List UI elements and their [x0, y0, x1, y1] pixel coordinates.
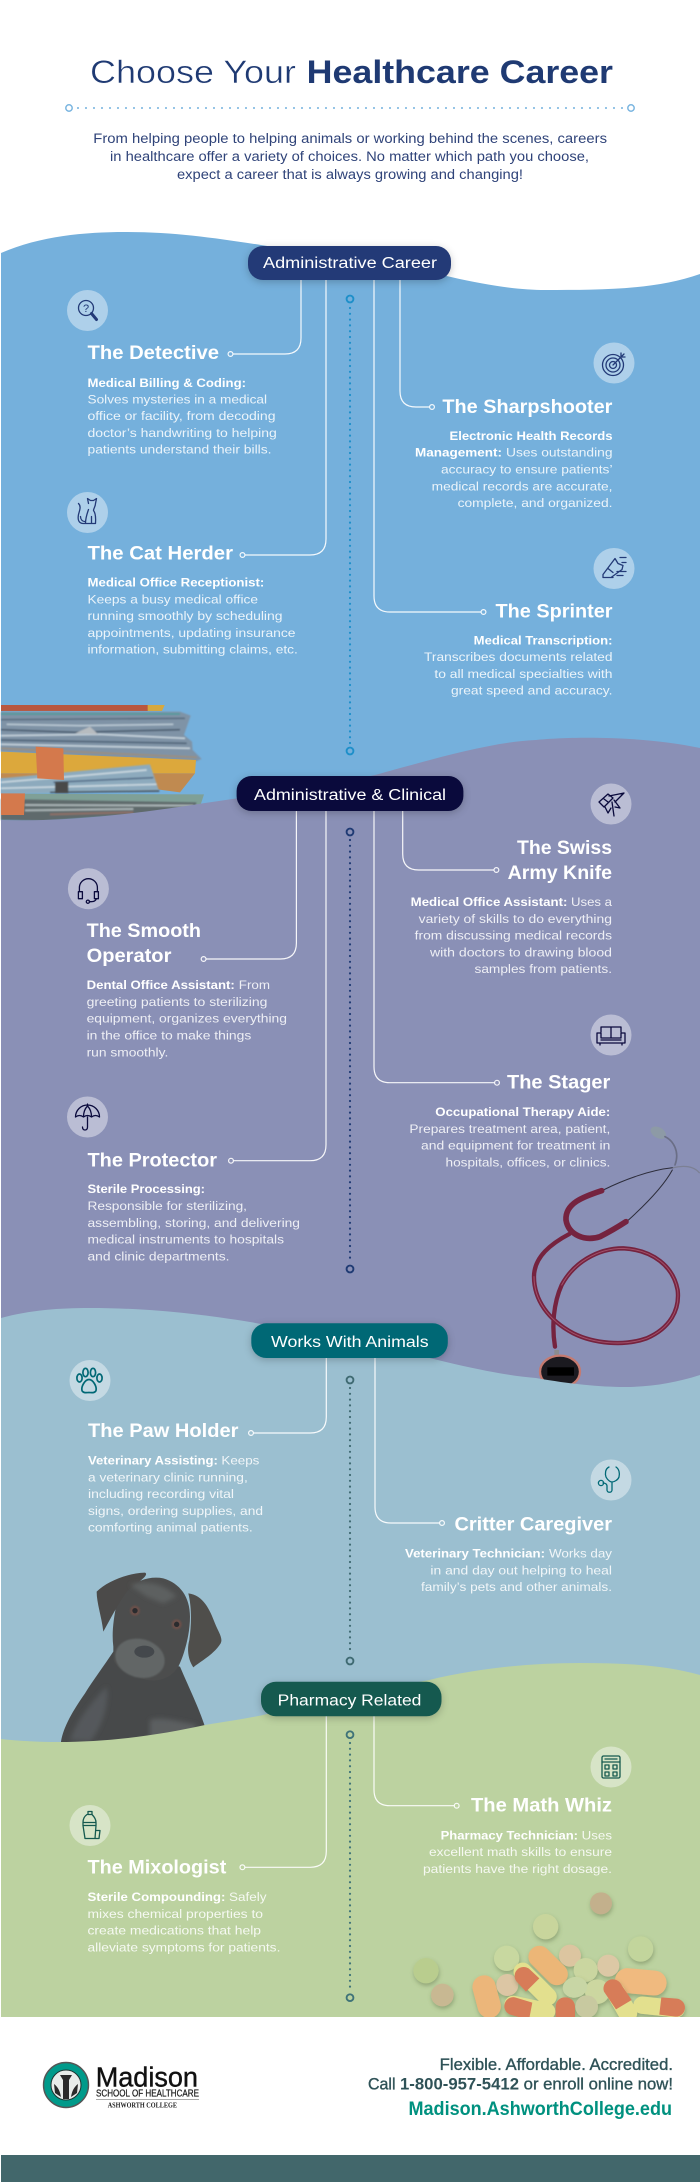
title: Healthcare Career [307, 54, 613, 90]
career: the smooth operator: equipment, organizes everything [87, 1012, 287, 1026]
icon: swiss army knife [590, 784, 632, 824]
photo: pills [413, 1892, 686, 2027]
career: the sprinter: The Sprinter [496, 601, 613, 623]
intro text: From helping people to helping animals or working behind the scenes, careers [93, 131, 607, 146]
footer call to action: 1-800-957-5412 [400, 2076, 519, 2094]
icon: cocktail shaker [70, 1805, 110, 1846]
career: the math whiz: Pharmacy Technician: [441, 1828, 578, 1842]
connectors [240, 1716, 459, 1870]
career: the sprinter: Transcribes documents related [424, 650, 612, 664]
career: the smooth operator: run smoothly. [87, 1046, 168, 1060]
section: works with animals [70, 1323, 632, 1664]
career: the swiss army knife: Army Knife [508, 862, 612, 884]
intro text: in healthcare offer a variety of choices. No matter which path you choose, [110, 149, 589, 164]
logo: madison school of healthcare: ASHWORTH COLLEGE [108, 2100, 177, 2110]
career: the cat herder: Keeps a busy medical office [88, 592, 258, 606]
career: the paw holder: Keeps [221, 1454, 259, 1468]
career: the paw holder: comforting animal patients. [88, 1521, 253, 1535]
photo: puppy [61, 1573, 221, 1750]
footer call to action: Call [368, 2076, 396, 2094]
career: the protector: Sterile Processing: [88, 1182, 205, 1196]
panel background: administrative and clinical [1, 738, 700, 1400]
footer call to action: Flexible. Affordable. Accredited. [440, 2056, 673, 2074]
career: the smooth operator: Operator [87, 945, 172, 967]
career: critter caregiver: Critter Caregiver [454, 1514, 612, 1536]
career: the sharpshooter: medical records are accurate, [432, 479, 612, 493]
career: the swiss army knife: Medical Office Assistant: [411, 895, 567, 909]
logo: madison school of healthcare [44, 2062, 199, 2110]
icon: magnifying glass [67, 290, 108, 331]
career: the cat herder: Medical Office Receptionist: [88, 576, 264, 590]
career: the protector: medical instruments to hospitals [88, 1233, 284, 1247]
section: pharmacy related [70, 1682, 632, 2001]
logo: madison school of healthcare: Madison [96, 2062, 198, 2093]
career: the stager [409, 1072, 611, 1170]
career: the stager: Prepares treatment area, patient, [409, 1122, 610, 1136]
career: the smooth operator: The Smooth [87, 920, 201, 942]
footer bar [1, 2155, 700, 2182]
career: critter caregiver: Works day [549, 1547, 613, 1561]
career: the protector: Responsible for sterilizing, [88, 1199, 247, 1213]
career: the sharpshooter: The Sharpshooter [442, 396, 613, 418]
career: the cat herder: information, submitting claims, etc. [88, 643, 298, 657]
central dotted line [347, 1377, 353, 1664]
career: the protector: assembling, storing, and delivering [88, 1216, 300, 1230]
section: administrative career [67, 246, 634, 754]
pill heading: administrative career: Administrative Career [263, 255, 437, 272]
career: the detective: Medical Billing & Coding: [88, 376, 246, 390]
career: the paw holder [88, 1420, 263, 1535]
career: the paw holder: signs, ordering supplies, and [88, 1504, 263, 1518]
panel background: administrative career [1, 232, 700, 830]
career: critter caregiver: family’s pets and other animals. [421, 1580, 612, 1594]
logo: madison school of healthcare: SCHOOL OF HEALTHCARE [96, 2088, 199, 2100]
title divider [66, 105, 634, 111]
career: the stager: and equipment for treatment in [421, 1139, 610, 1153]
career: the cat herder: appointments, updating insurance [88, 626, 296, 640]
career: the smooth operator: From [239, 978, 270, 992]
logo seal [44, 2062, 88, 2108]
footer call to action [368, 2056, 673, 2120]
icon: magnifying glass: ? [83, 303, 89, 315]
career: the paw holder: The Paw Holder [88, 1420, 239, 1442]
career: the swiss army knife: with doctors to drawing blood [429, 945, 612, 959]
career: the sprinter: Medical Transcription: [474, 633, 612, 647]
career: the sprinter: to all medical specialties with [434, 667, 612, 681]
career: the mixologist: Safely [229, 1890, 268, 1904]
photo: stethoscope [534, 1124, 699, 1388]
pill heading: works with animals [251, 1323, 448, 1358]
career: the detective [88, 342, 277, 456]
career: the cat herder [88, 542, 298, 657]
central dotted line [347, 829, 353, 1272]
career: the swiss army knife: from discussing medical records [415, 929, 612, 943]
icon: umbrella [67, 1096, 108, 1138]
career: the sharpshooter: complete, and organized. [458, 496, 612, 510]
career: the math whiz: The Math Whiz [471, 1795, 612, 1817]
career: the sharpshooter [415, 396, 613, 510]
career: the detective: Solves mysteries in a medical [88, 392, 267, 406]
pill heading: administrative and clinical: Administrative & Clinical [254, 787, 446, 804]
panel background: pharmacy related [1, 1663, 700, 2017]
photo: stack of folders [1, 705, 204, 821]
career: the mixologist [88, 1857, 280, 1954]
section: administrative and clinical [67, 776, 632, 1272]
career: the protector [88, 1150, 300, 1264]
career: the swiss army knife: The Swiss [517, 837, 612, 859]
career: the mixologist: alleviate symptoms for patients. [88, 1940, 280, 1954]
icon: target [594, 342, 634, 384]
icon: headset [68, 868, 109, 909]
career: the smooth operator: in the office to make things [87, 1029, 251, 1043]
title: Choose Your [90, 54, 296, 90]
career: the stager: hospitals, offices, or clinics. [446, 1156, 610, 1170]
career: the sprinter [424, 601, 613, 698]
career: the swiss army knife [411, 837, 612, 976]
career: the detective: The Detective [88, 342, 219, 364]
career: the sharpshooter: accuracy to ensure patients’ [441, 462, 612, 476]
icon: cat [67, 492, 108, 533]
career: the mixologist: Sterile Compounding: [88, 1890, 225, 1904]
career: the mixologist: create medications that help [88, 1924, 261, 1938]
career: critter caregiver: Veterinary Technician: [405, 1547, 545, 1561]
career: the detective: patients understand their bills. [88, 442, 272, 456]
career: the math whiz: excellent math skills to ensure [429, 1845, 612, 1859]
career: the swiss army knife: samples from patients. [474, 962, 612, 976]
icon: paw print [70, 1360, 110, 1401]
career: the smooth operator: Dental Office Assistant: [87, 978, 235, 992]
career: the math whiz: Uses [582, 1828, 612, 1842]
pill heading: works with animals: Works With Animals [271, 1334, 429, 1351]
pill heading: pharmacy related [261, 1682, 442, 1716]
icon: stethoscope [590, 1460, 632, 1500]
panel background: works with animals [1, 1308, 700, 1750]
title [90, 54, 613, 90]
career: the smooth operator [87, 920, 287, 1060]
career: the stager: Occupational Therapy Aide: [435, 1105, 610, 1119]
career: the swiss army knife: variety of skills to do everything [419, 912, 612, 926]
icon: calculator [590, 1746, 632, 1788]
career: the sharpshooter: Management: [415, 446, 502, 460]
footer call to action: or enroll online now! [524, 2076, 673, 2094]
career: the math whiz [423, 1795, 612, 1876]
career: critter caregiver [405, 1514, 613, 1594]
intro text: expect a career that is always growing and changing! [177, 167, 523, 182]
career: the cat herder: The Cat Herder [88, 542, 233, 564]
career: the paw holder: including recording vital [88, 1487, 234, 1501]
central dotted line [347, 1731, 353, 2001]
career: the sharpshooter: Uses outstanding [506, 446, 612, 460]
career: the protector: and clinic departments. [88, 1250, 230, 1264]
career: the math whiz: patients have the right dosage. [423, 1862, 612, 1876]
central dotted line [347, 296, 353, 754]
footer call to action: Madison.AshworthCollege.edu [408, 2098, 672, 2120]
icon: running shoe [594, 548, 634, 589]
career: the stager: The Stager [507, 1072, 611, 1094]
career: the smooth operator: greeting patients to sterilizing [87, 995, 267, 1009]
connectors [228, 280, 486, 614]
connectors [249, 1358, 444, 1525]
career: the mixologist: The Mixologist [88, 1857, 227, 1879]
career: the paw holder: a veterinary clinic running, [88, 1470, 248, 1484]
career: the swiss army knife: Uses a [571, 895, 612, 909]
icon: sofa [590, 1014, 632, 1056]
career: the sprinter: great speed and accuracy. [451, 684, 612, 698]
intro text [93, 131, 607, 182]
career: critter caregiver: in and day out helping to heal [430, 1563, 612, 1577]
pill heading: administrative and clinical [237, 776, 463, 811]
pill heading: administrative career [248, 246, 451, 280]
pill heading: pharmacy related: Pharmacy Related [278, 1693, 421, 1710]
career: the detective: doctor’s handwriting to helping [88, 426, 277, 440]
career: the sharpshooter: Electronic Health Records [450, 429, 613, 443]
career: the cat herder: running smoothly by scheduling [88, 609, 282, 623]
career: the paw holder: Veterinary Assisting: [88, 1454, 218, 1468]
career: the protector: The Protector [88, 1150, 217, 1172]
career: the mixologist: mixes chemical properties to [88, 1907, 263, 1921]
career: the detective: office or facility, from decoding [88, 409, 276, 423]
connectors [201, 811, 499, 1163]
